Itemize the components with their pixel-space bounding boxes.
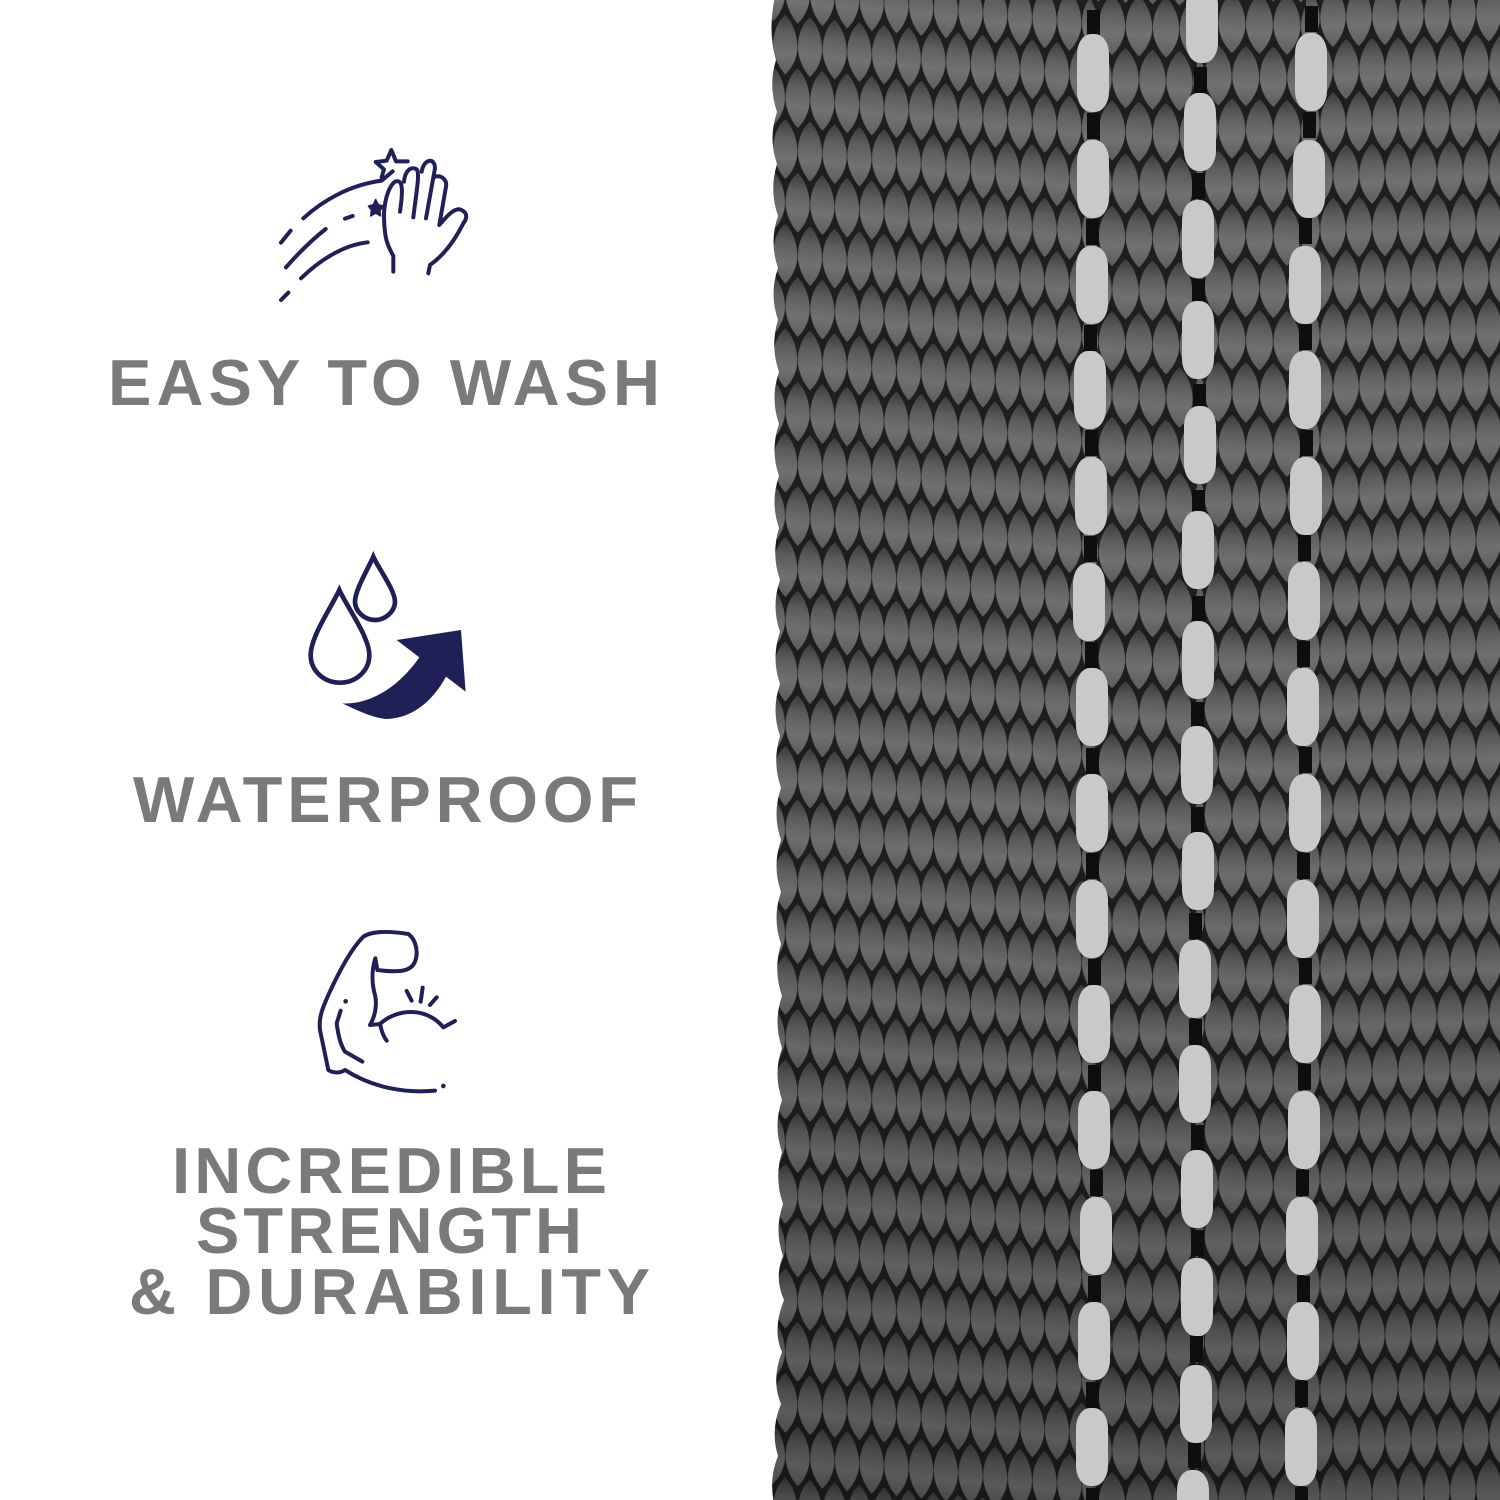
- webbing strip: right band: [1306, 0, 1500, 1500]
- webbing strip: second band: [1092, 0, 1197, 1500]
- panel: waterproof: [133, 557, 638, 836]
- label: incredible strength and durability: & DURABILITY: [129, 1255, 650, 1328]
- icon: hand wiping with stars: [281, 150, 466, 300]
- label: incredible strength and durability: INCREDIBLE: [172, 1134, 607, 1207]
- label: easy to wash: EASY TO WASH: [108, 346, 660, 419]
- icon: water drops and arrow: [311, 557, 466, 719]
- panel: incredible strength and durability: [129, 932, 650, 1328]
- gaps between stitches: [1084, 6, 1318, 1500]
- label: incredible strength and durability: STRENGTH: [196, 1194, 582, 1267]
- webbing strip: left band: [760, 0, 1092, 1500]
- label: incredible strength and durability: [129, 1134, 650, 1328]
- reflective stitches: column 2: [1177, 0, 1218, 1500]
- webbing strip: third band: [1197, 0, 1306, 1500]
- reflective stitches: column 3: [1285, 33, 1327, 1486]
- panel: easy to wash: [108, 150, 660, 419]
- icon: flexed arm: [320, 932, 455, 1091]
- label: waterproof: WATERPROOF: [133, 763, 638, 836]
- reflective stitches: column 1: [1073, 34, 1112, 1486]
